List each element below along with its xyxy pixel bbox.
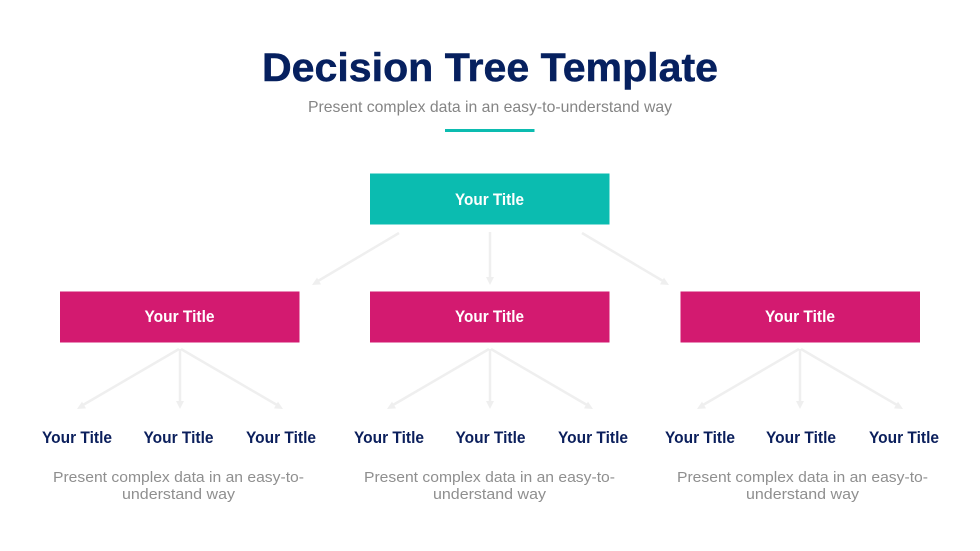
leaf titles: left group: Your Title [42, 428, 112, 447]
branch box: right [680, 292, 920, 342]
description: center [364, 469, 615, 503]
description: left [53, 469, 304, 503]
leaf titles: left group: Your Title [144, 428, 214, 447]
leaf titles: left group: Your Title [246, 428, 316, 447]
leaf titles: right group: Your Title [869, 428, 939, 447]
leaf titles: right group: Your Title [766, 428, 836, 447]
description: left: understand way [122, 486, 236, 503]
leaf titles: left group [42, 428, 316, 447]
arrows: right branch [697, 349, 903, 409]
root box: Your Title [455, 190, 524, 209]
branch box: center: Your Title [455, 307, 524, 326]
leaf titles: right group [665, 428, 939, 447]
leaf titles: center group: Your Title [354, 428, 424, 447]
description: center: understand way [433, 486, 547, 503]
branch box: left [60, 292, 300, 342]
leaf titles: center group [354, 428, 628, 447]
branch box: left: Your Title [144, 307, 214, 326]
description: left: Present complex data in an easy-to- [53, 469, 304, 486]
leaf titles: right group: Your Title [665, 428, 735, 447]
branch box: right: Your Title [765, 307, 835, 326]
branch box: center [370, 292, 610, 342]
root box [370, 174, 610, 224]
title: Decision Tree Template [262, 46, 718, 90]
description: center: Present complex data in an easy-to- [364, 469, 615, 486]
description: right: Present complex data in an easy-to- [677, 469, 928, 486]
description: right: understand way [746, 486, 860, 503]
arrows: center branch [387, 349, 593, 409]
leaf titles: center group: Your Title [456, 428, 526, 447]
subtitle: Present complex data in an easy-to-understand way [308, 99, 672, 116]
leaf titles: center group: Your Title [558, 428, 628, 447]
arrows: root to branches [312, 232, 669, 285]
arrows: left branch [77, 349, 283, 409]
description: right [677, 469, 928, 503]
title underline [445, 129, 534, 132]
